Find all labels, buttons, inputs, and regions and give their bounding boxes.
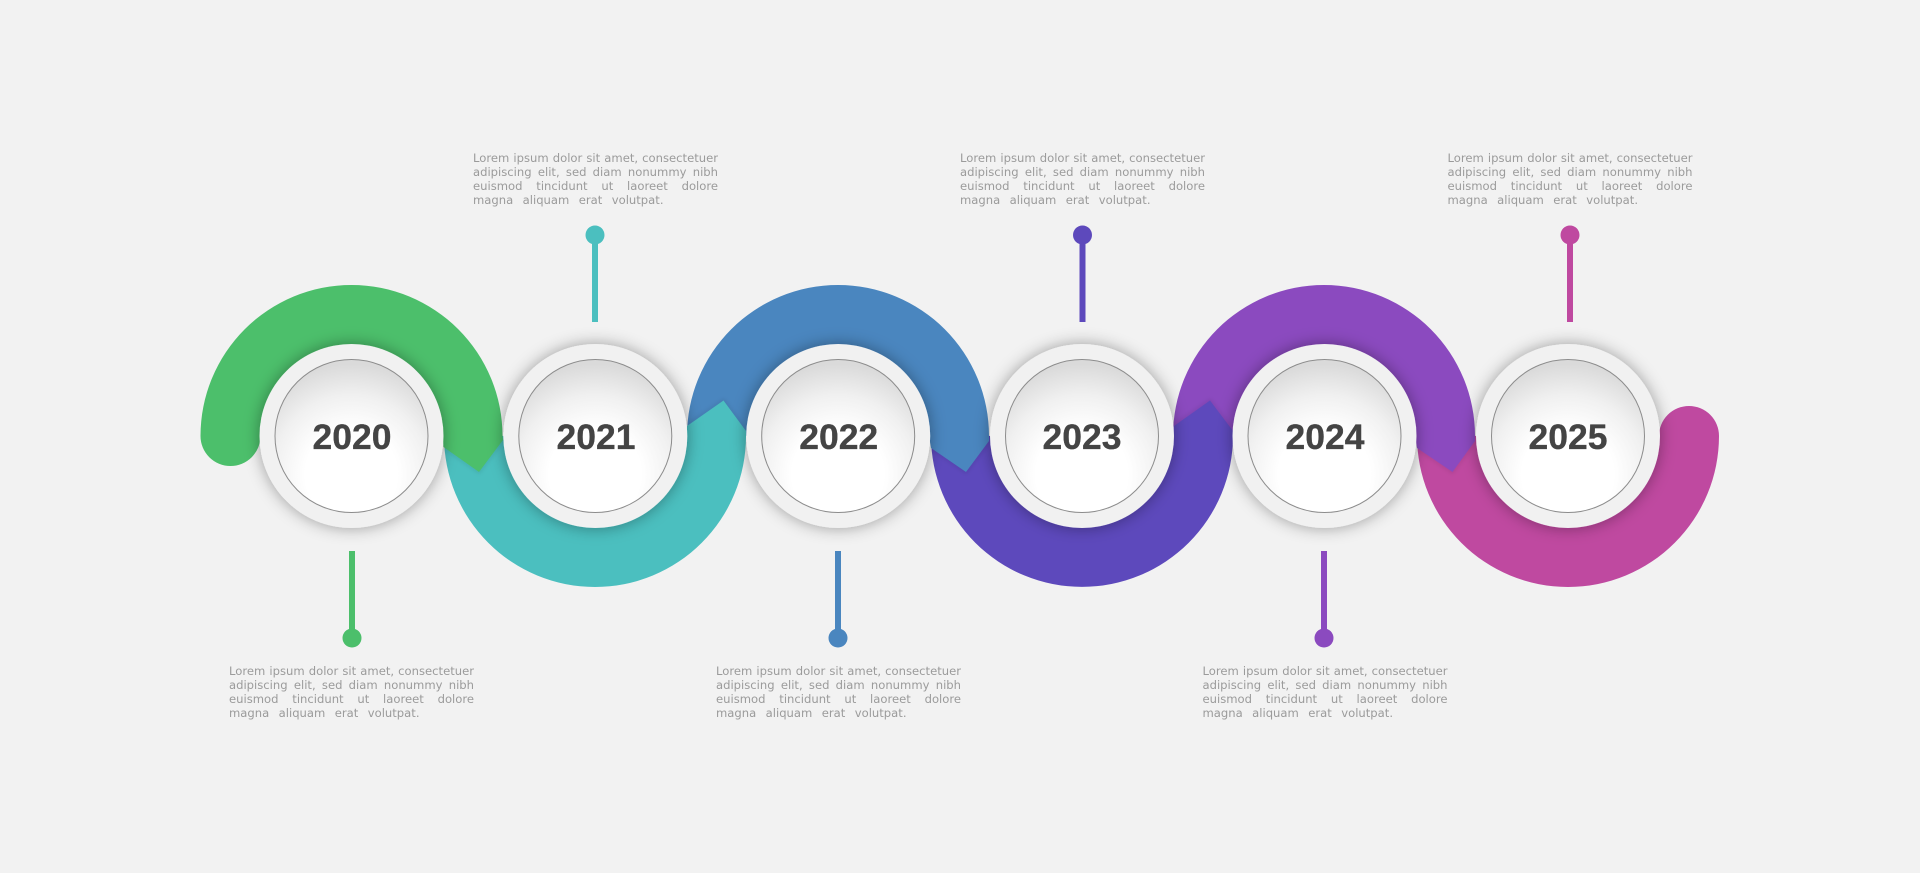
medallion: 2023: 2023 [1043,417,1121,457]
text block: 2020: euismod tincidunt ut laoreet dolore [229,692,474,706]
text block: 2022: adipiscing elit, sed diam nonummy nibh [716,678,961,692]
text block: 2021 [473,151,718,207]
text block: 2024: adipiscing elit, sed diam nonummy nibh [1202,678,1448,692]
text block: 2020: Lorem ipsum dolor sit amet, consectetuer [229,664,474,678]
medallion: 2020 [260,344,444,528]
text block: 2020: magna aliquam erat volutpat. [229,706,420,720]
text block: 2024 [1202,664,1448,720]
text block: 2024: magna aliquam erat volutpat. [1202,706,1393,720]
medallion: 2024: 2024 [1286,417,1365,457]
band: 2024 purple [1173,285,1475,472]
medallion: 2024 [1232,344,1416,528]
text block: 2020 [229,664,474,720]
text block: 2025: magna aliquam erat volutpat. [1448,193,1638,207]
text block: 2023 [960,151,1205,207]
text block: 2023: adipiscing elit, sed diam nonummy nibh [960,165,1205,179]
pin: 2024 [1314,551,1334,648]
medallion: 2021: 2021 [557,417,635,457]
text block: 2024: Lorem ipsum dolor sit amet, consectetuer [1202,664,1448,678]
text block: 2025: adipiscing elit, sed diam nonummy nibh [1448,165,1692,179]
year medallions [260,344,1660,528]
text block: 2022: euismod tincidunt ut laoreet dolore [716,692,961,706]
pin: 2020 [342,551,362,648]
band: 2021 teal [444,400,746,587]
medallion: 2023 [990,344,1174,528]
text block: 2023: Lorem ipsum dolor sit amet, consectetuer [960,151,1205,165]
text block: 2021: adipiscing elit, sed diam nonummy nibh [473,165,718,179]
text block: 2020: adipiscing elit, sed diam nonummy nibh [229,678,474,692]
text block: 2021: Lorem ipsum dolor sit amet, consectetuer [473,151,718,165]
text block: 2021: euismod tincidunt ut laoreet dolore [473,179,718,193]
text block: 2022: magna aliquam erat volutpat. [716,706,906,720]
text block: 2023: magna aliquam erat volutpat. [960,193,1150,207]
text block: 2025: euismod tincidunt ut laoreet dolore [1448,179,1692,193]
medallion: 2025: 2025 [1529,417,1607,457]
text block: 2024: euismod tincidunt ut laoreet dolore [1202,692,1448,706]
medallion: 2021 [503,344,687,528]
text block: 2022 [716,664,961,720]
pin: 2023 [1073,226,1092,322]
pin: 2025 [1560,226,1580,322]
band: 2023 indigo [931,400,1233,587]
band: 2022 blue [687,285,989,472]
pin: 2022 [828,551,848,648]
medallion: 2022 [746,344,930,528]
text block: 2023: euismod tincidunt ut laoreet dolore [960,179,1205,193]
band: 2025 magenta [1417,406,1719,587]
band: 2020 green [200,285,503,472]
pin: 2021 [586,226,604,322]
medallion: 2022: 2022 [799,417,878,457]
text block: 2021: magna aliquam erat volutpat. [473,193,664,207]
medallion: 2020: 2020 [313,417,391,457]
text block: 2022: Lorem ipsum dolor sit amet, consectetuer [716,664,961,678]
ribbon: wavy timeline band [200,285,1719,587]
medallion: 2025 [1476,344,1660,528]
text block: 2025: Lorem ipsum dolor sit amet, consectetuer [1448,151,1692,165]
text block: 2025 [1448,151,1692,207]
